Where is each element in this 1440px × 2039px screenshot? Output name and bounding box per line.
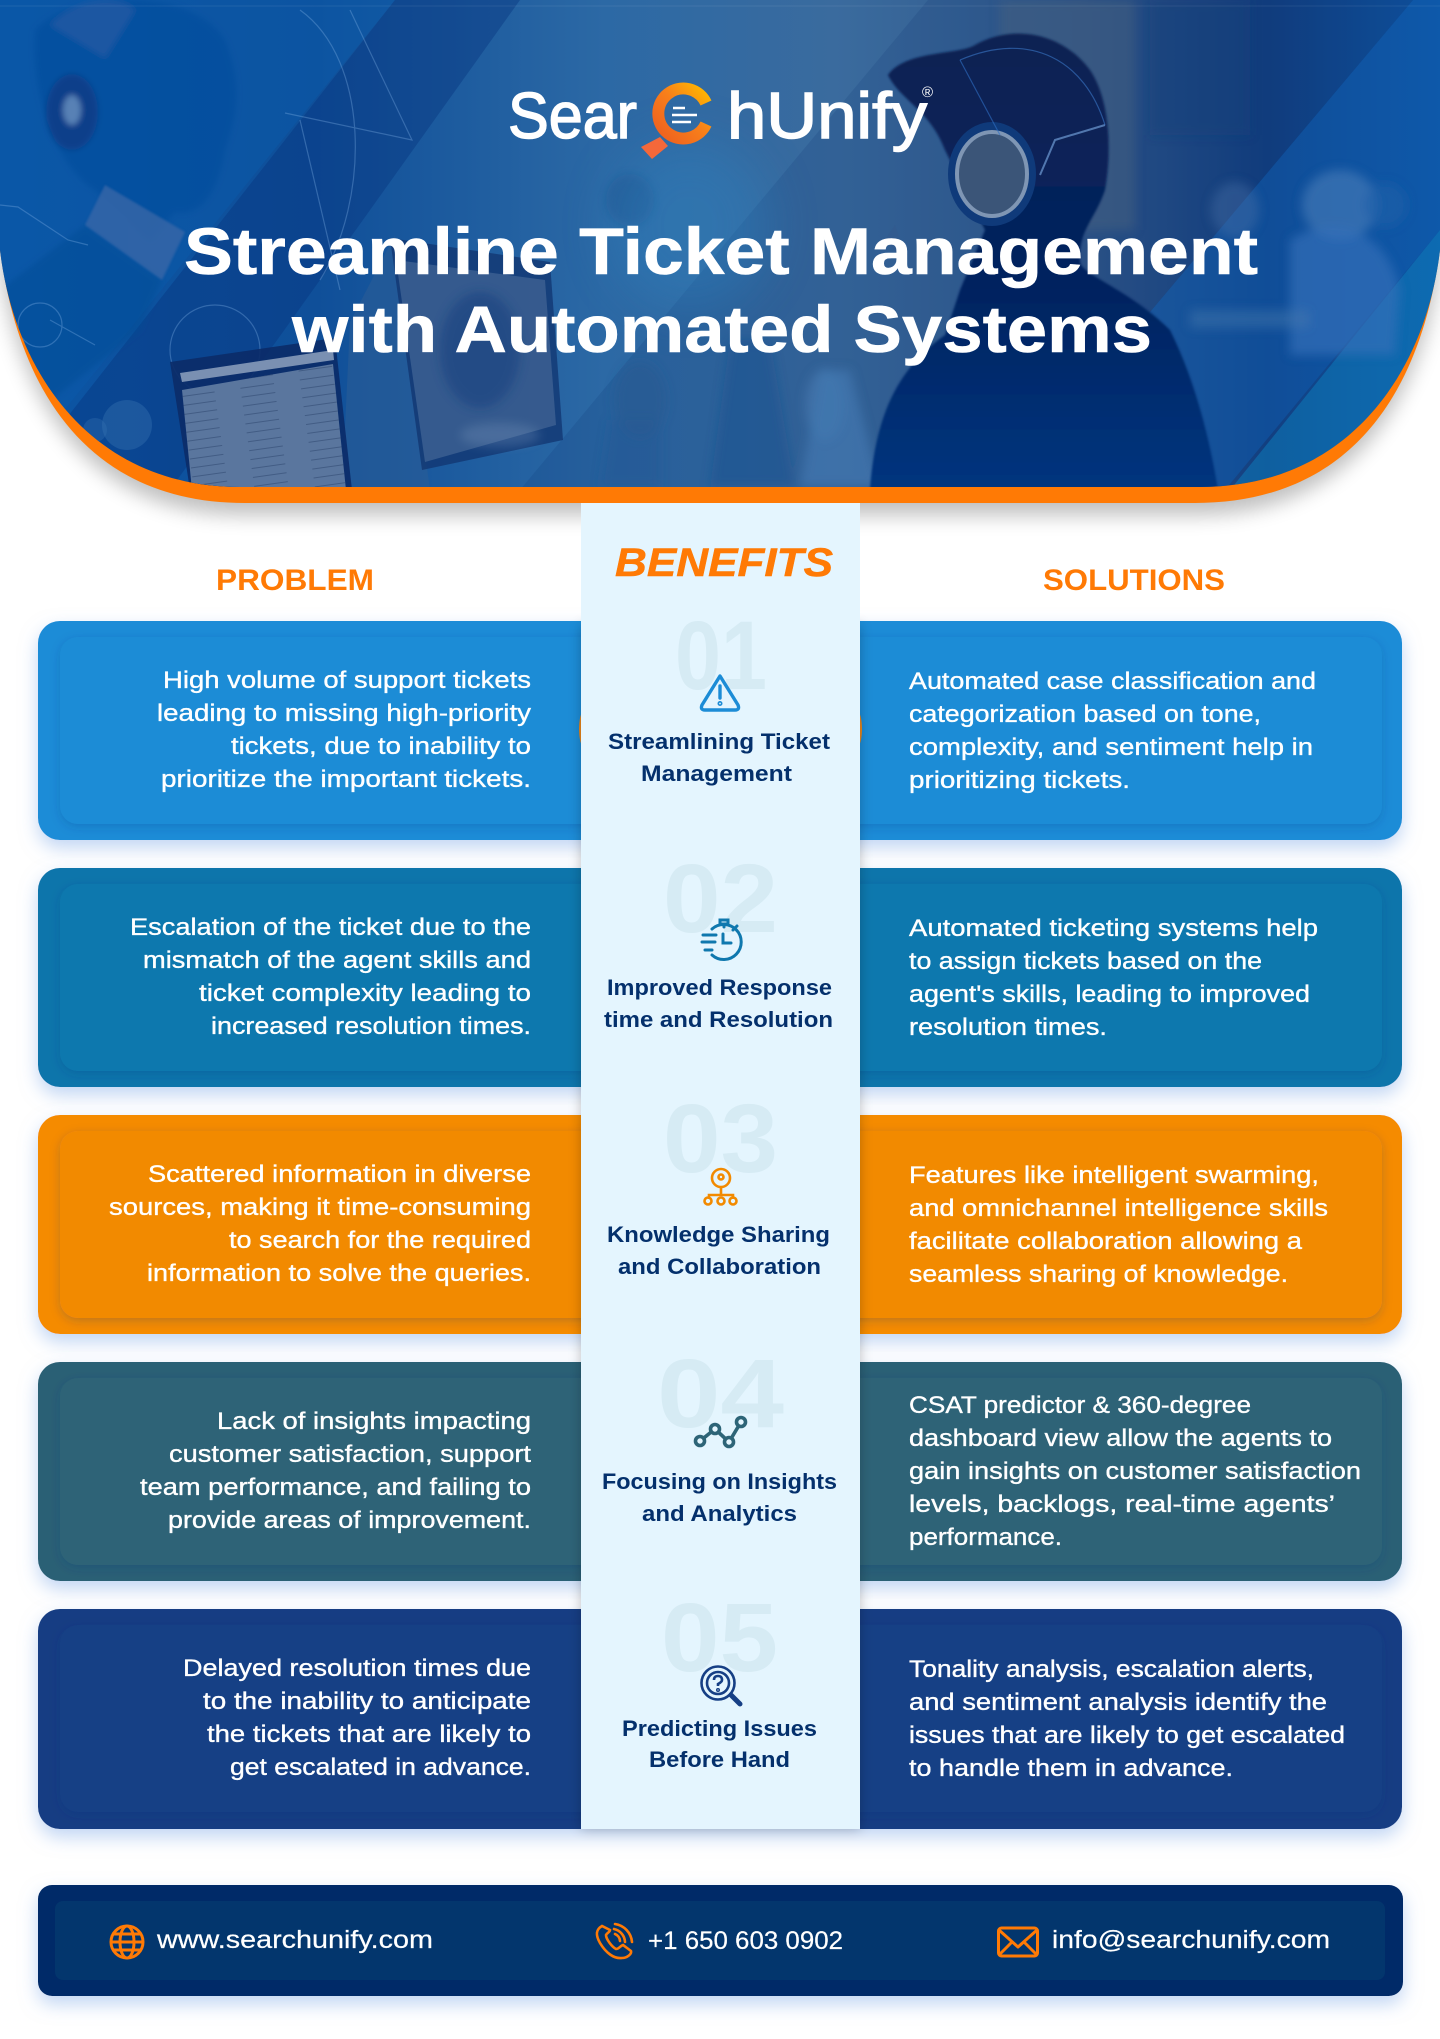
footer contact bar bbox=[38, 1885, 1403, 1996]
text: solution 4: gain insights on customer satisfaction bbox=[909, 1458, 1361, 1485]
text: solution 1 bbox=[909, 668, 1316, 794]
text: problem 1: prioritize the important tickets. bbox=[161, 766, 531, 793]
label: Streamlining Ticket bbox=[608, 729, 831, 754]
text: solution 3: seamless sharing of knowledge. bbox=[909, 1261, 1288, 1288]
label bbox=[602, 1469, 837, 1526]
text: problem 4: provide areas of improvement. bbox=[168, 1507, 531, 1534]
text: problem 2: Escalation of the ticket due to the bbox=[130, 914, 531, 941]
icon: analytics line bbox=[696, 1418, 746, 1446]
label: Focusing on Insights bbox=[602, 1469, 837, 1494]
benefit 5 bbox=[622, 1583, 817, 1772]
icon: warning triangle bbox=[701, 676, 739, 710]
title bbox=[184, 214, 1258, 366]
text: problem 1 bbox=[157, 667, 531, 793]
text: solution 3: and omnichannel intelligence skills bbox=[909, 1195, 1328, 1222]
phone number: +1 650 603 0902 bbox=[648, 1927, 843, 1955]
icon: magnifier letter C bbox=[641, 88, 706, 159]
panel: card 2 bbox=[38, 868, 1402, 1087]
text: problem 3: sources, making it time-consuming bbox=[109, 1194, 531, 1221]
text: problem 4: team performance, and failing to bbox=[140, 1474, 531, 1501]
icon: idea network bbox=[704, 1169, 736, 1204]
title: with Automated Systems bbox=[291, 292, 1152, 366]
label bbox=[622, 1716, 817, 1772]
illustration: female agent with headset bbox=[870, 34, 1218, 490]
text: solution 2: resolution times. bbox=[909, 1014, 1107, 1041]
text: problem 4 bbox=[140, 1408, 531, 1534]
email: info@searchunify.com bbox=[1052, 1926, 1330, 1954]
icon: stopwatch bbox=[702, 920, 741, 959]
label bbox=[604, 975, 833, 1032]
text: solution 3: facilitate collaboration allowing a bbox=[909, 1228, 1303, 1255]
text: solution 4: dashboard view allow the agents to bbox=[909, 1425, 1332, 1452]
text: solution 1: Automated case classification and bbox=[909, 668, 1316, 695]
text: solution 3: Features like intelligent swarming, bbox=[909, 1162, 1319, 1189]
benefit 3: 03 bbox=[663, 1084, 778, 1193]
label: Before Hand bbox=[649, 1747, 790, 1772]
text: problem 1: leading to missing high-priority bbox=[157, 700, 531, 727]
icon: globe bbox=[111, 1926, 143, 1958]
text: solution 2: Automated ticketing systems help bbox=[909, 915, 1318, 942]
label: Management bbox=[641, 761, 793, 786]
title: Streamline Ticket Management bbox=[184, 214, 1258, 288]
label: Predicting Issues bbox=[622, 1716, 817, 1741]
label bbox=[607, 1222, 830, 1279]
text: solution 1: prioritizing tickets. bbox=[909, 767, 1130, 794]
logo: Sear bbox=[508, 79, 637, 152]
text: problem 3: Scattered information in diverse bbox=[148, 1161, 531, 1188]
text: problem 5: to the inability to anticipate bbox=[203, 1688, 531, 1715]
text: problem 5: the tickets that are likely to bbox=[207, 1721, 531, 1748]
text: problem 1: High volume of support tickets bbox=[163, 667, 531, 694]
heading: benefits: BENEFITS bbox=[615, 541, 833, 585]
label: and Collaboration bbox=[618, 1254, 821, 1279]
text: problem 3: to search for the required bbox=[229, 1227, 531, 1254]
website: www.searchunify.com bbox=[156, 1926, 433, 1954]
benefit 1 bbox=[608, 601, 831, 786]
text: solution 2: to assign tickets based on the bbox=[909, 948, 1262, 975]
label: and Analytics bbox=[642, 1501, 797, 1526]
panel: card 5 bbox=[38, 1609, 1402, 1829]
text: solution 5: to handle them in advance. bbox=[909, 1755, 1233, 1782]
text: problem 5: Delayed resolution times due bbox=[183, 1655, 531, 1682]
label: time and Resolution bbox=[604, 1007, 833, 1032]
text: solution 4: levels, backlogs, real-time agents’ bbox=[909, 1491, 1335, 1518]
label: Improved Response bbox=[607, 975, 832, 1000]
text: problem 3 bbox=[109, 1161, 531, 1287]
text: solution 3 bbox=[909, 1162, 1328, 1288]
panel: card 4 bbox=[38, 1362, 1402, 1581]
text: problem 5: get escalated in advance. bbox=[230, 1754, 531, 1781]
text: solution 1: categorization based on tone, bbox=[909, 701, 1261, 728]
heading: solutions: SOLUTIONS bbox=[1043, 564, 1225, 597]
icon: question magnifier bbox=[702, 1666, 740, 1704]
logo bbox=[508, 79, 933, 159]
benefit 2 bbox=[604, 844, 833, 1032]
text: problem 5 bbox=[183, 1655, 531, 1781]
benefit 3 bbox=[607, 1084, 830, 1279]
illustration: male agent with headset bbox=[0, 0, 412, 450]
text: solution 5: Tonality analysis, escalation alerts, bbox=[909, 1656, 1314, 1683]
text: problem 4: Lack of insights impacting bbox=[217, 1408, 531, 1435]
text: solution 4 bbox=[909, 1392, 1361, 1551]
benefit 4: 04 bbox=[657, 1339, 784, 1448]
text: problem 1: tickets, due to inability to bbox=[231, 733, 531, 760]
text: solution 5: issues that are likely to get escalated bbox=[909, 1722, 1345, 1749]
icon: envelope bbox=[998, 1928, 1038, 1956]
benefit 2: 02 bbox=[663, 844, 778, 953]
text: solution 5 bbox=[909, 1656, 1345, 1782]
logo: hUnify bbox=[727, 79, 928, 152]
text: solution 2: agent's skills, leading to improved bbox=[909, 981, 1310, 1008]
text: solution 5: and sentiment analysis identify the bbox=[909, 1689, 1327, 1716]
panel: card 1 bbox=[38, 621, 1402, 840]
panel: card 3 bbox=[38, 1115, 1402, 1334]
header banner bbox=[0, 0, 1440, 515]
logo: ® bbox=[922, 84, 933, 101]
text: solution 4: CSAT predictor & 360-degree bbox=[909, 1392, 1251, 1419]
benefit 4 bbox=[602, 1339, 837, 1526]
text: solution 1: complexity, and sentiment help in bbox=[909, 734, 1313, 761]
label: Knowledge Sharing bbox=[607, 1222, 830, 1247]
text: solution 4: performance. bbox=[909, 1524, 1062, 1551]
text: problem 2: mismatch of the agent skills and bbox=[143, 947, 531, 974]
text: problem 4: customer satisfaction, support bbox=[169, 1441, 531, 1468]
text: problem 3: information to solve the queries. bbox=[147, 1260, 531, 1287]
text: problem 2: ticket complexity leading to bbox=[199, 980, 531, 1007]
illustration: monitors bbox=[170, 235, 563, 490]
text: problem 2: increased resolution times. bbox=[211, 1013, 531, 1040]
label bbox=[608, 729, 831, 786]
benefit 5: 05 bbox=[661, 1583, 778, 1692]
heading: problem: PROBLEM bbox=[216, 564, 374, 597]
text: problem 2 bbox=[130, 914, 531, 1040]
icon: phone bbox=[597, 1924, 632, 1958]
panel: benefits column bbox=[579, 503, 862, 1829]
benefit 1: 01 bbox=[675, 601, 767, 710]
text: solution 2 bbox=[909, 915, 1318, 1041]
